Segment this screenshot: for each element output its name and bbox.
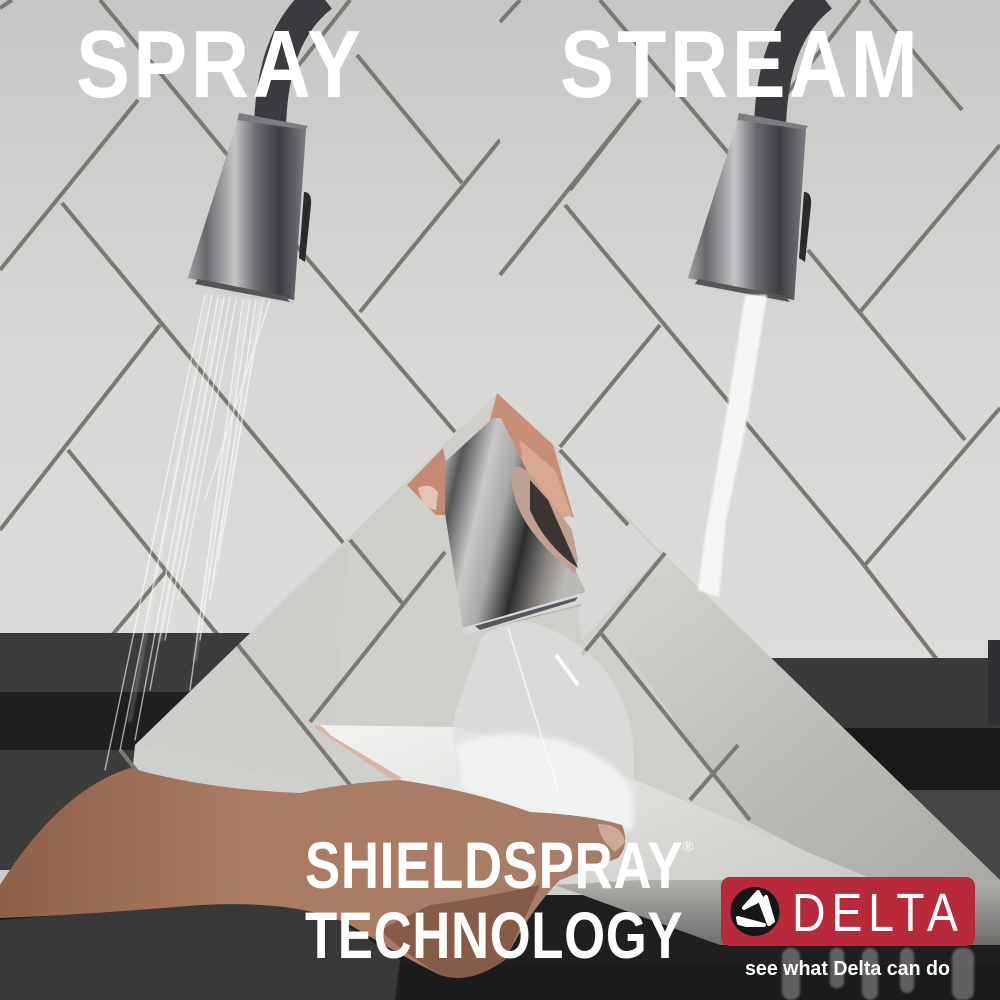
hand and arm — [0, 768, 625, 978]
tagline: see what Delta can do — [745, 958, 950, 980]
logo: delta: DELTA — [792, 882, 958, 943]
water bulb — [453, 623, 634, 830]
panel: spray background tiles — [0, 0, 500, 760]
panel: hand holding spray head — [407, 393, 585, 634]
water spray — [105, 295, 270, 770]
heading: stream: STREAM — [560, 10, 918, 118]
heading: technology: TECHNOLOGY — [305, 898, 683, 972]
icon: stream faucet — [687, 0, 822, 304]
panel: stream background tiles — [500, 0, 1000, 760]
heading: shieldspray: SHIELDSPRAY — [305, 828, 683, 902]
panel: bottom counter — [0, 880, 1000, 1000]
icon: spray faucet — [187, 0, 322, 304]
heading: spray: SPRAY — [76, 10, 361, 118]
panel: shieldspray center wedge — [120, 393, 1000, 900]
panel: right countertop and cabinet — [740, 640, 1000, 890]
plate — [313, 725, 870, 945]
water drips — [782, 948, 974, 1000]
panel: left countertop and cabinet — [0, 633, 300, 870]
logo: delta — [721, 877, 975, 946]
water stream — [698, 295, 767, 597]
registered mark: ® — [683, 838, 694, 854]
